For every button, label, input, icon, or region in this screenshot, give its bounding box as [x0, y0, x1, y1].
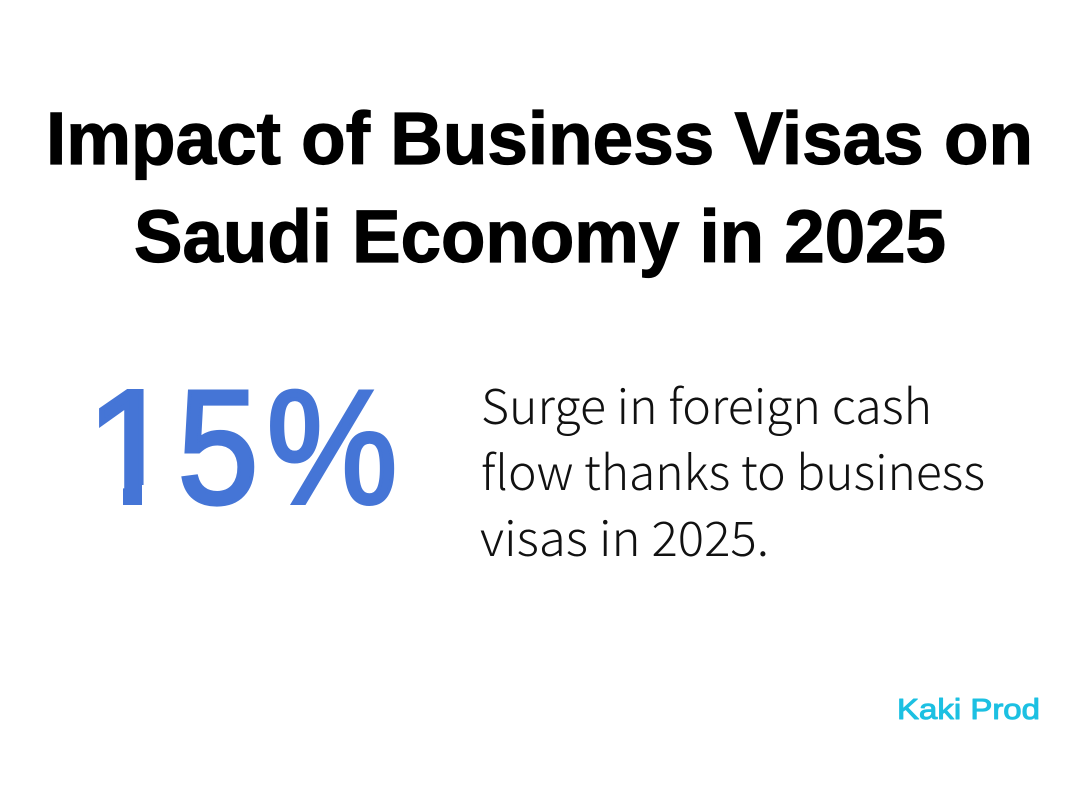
description text	[480, 368, 985, 570]
title: Saudi Economy in 2025	[134, 195, 946, 278]
description text: visas in 2025.	[480, 500, 769, 570]
big statistic: 15%: 5	[178, 357, 259, 538]
title	[46, 97, 1033, 278]
big statistic: 15%: 1	[86, 357, 176, 538]
title: Impact of Business Visas on	[46, 97, 1033, 180]
brand logo: Kaki Prod: Kaki Prod	[897, 694, 1040, 726]
description text: flow thanks to business	[481, 434, 985, 504]
big statistic: 15%: %	[267, 357, 398, 538]
description text: Surge in foreign cash	[481, 368, 932, 438]
big statistic: 15%	[99, 388, 394, 507]
